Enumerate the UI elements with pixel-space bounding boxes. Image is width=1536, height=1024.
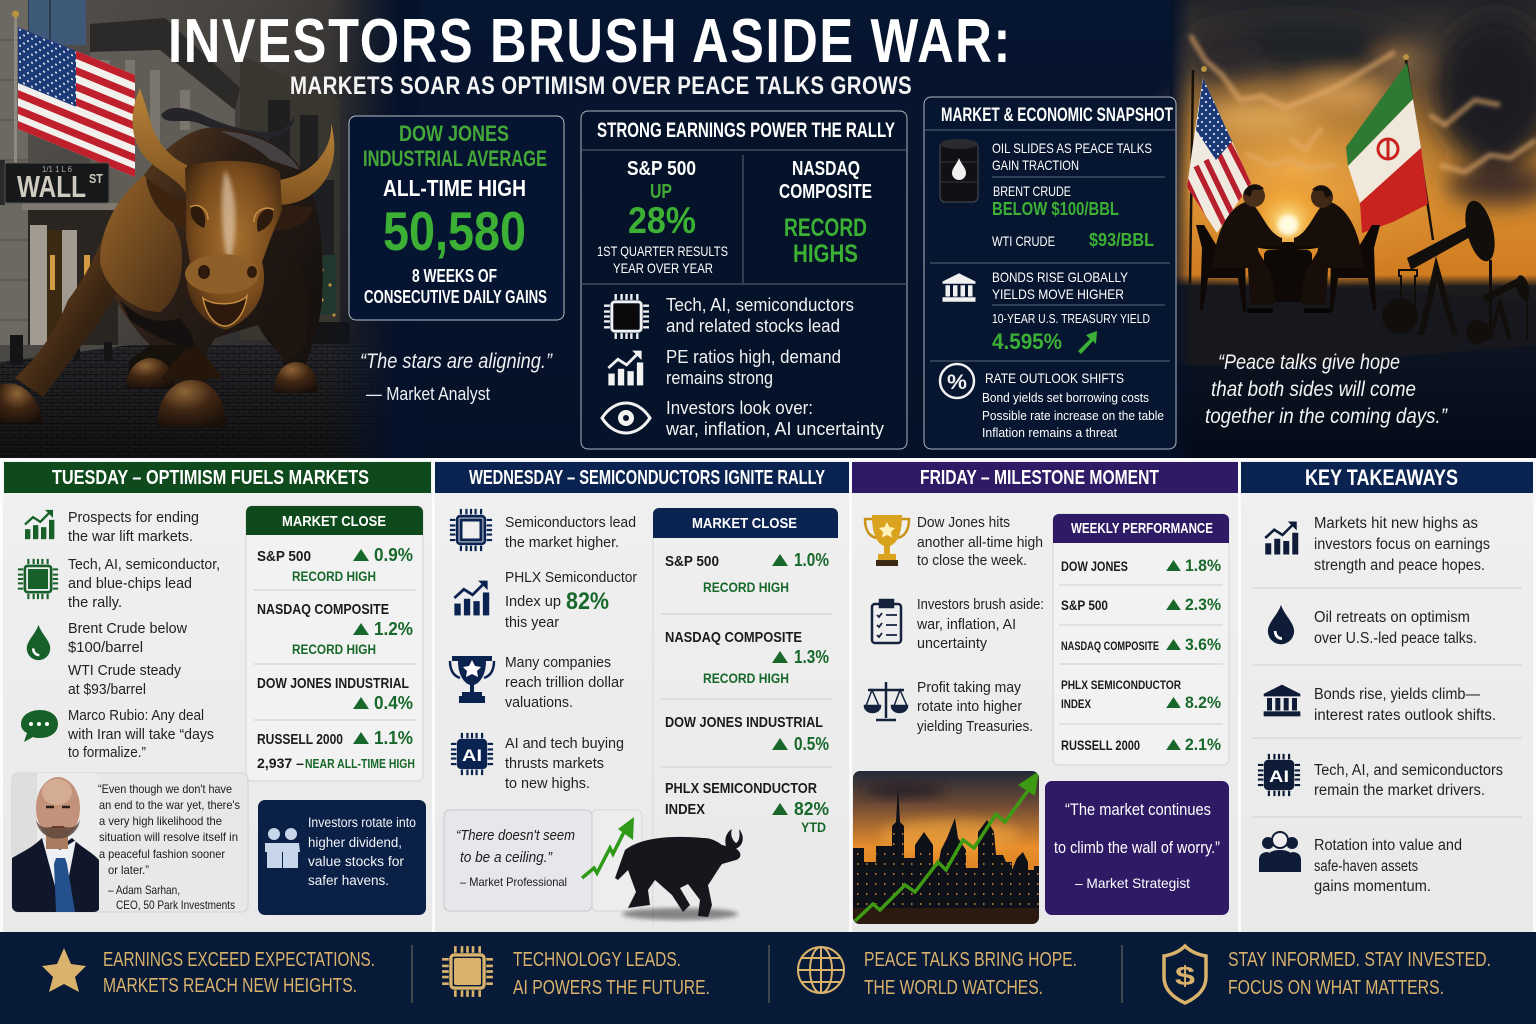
card: ceiling quote: – Market Professional xyxy=(460,875,567,889)
text: brush aside: uncertainty xyxy=(917,636,988,652)
Nasdaq stat: RECORD xyxy=(784,214,867,242)
icon: gold star xyxy=(42,948,86,992)
table: weekly performance: PHLX SEMICONDUCTOR xyxy=(1061,678,1181,692)
text: Dow hits: another all-time high xyxy=(917,535,1043,551)
subtitle: MARKETS SOAR AS OPTIMISM OVER PEACE TALKS GROWS xyxy=(290,72,912,100)
text: takeaway 4: remain the market drivers. xyxy=(1314,782,1485,799)
icon: AI chip xyxy=(1258,754,1300,796)
text: rate outlook: Bond yields set borrowing costs xyxy=(982,391,1149,405)
text: oil: GAIN TRACTION xyxy=(992,157,1079,173)
text: profit taking xyxy=(917,680,1033,735)
image: city skyline with rising arrow xyxy=(853,771,1039,924)
quote: stars aligning xyxy=(360,350,553,404)
text: prospects: the war lift markets. xyxy=(68,528,193,545)
table: market close Tuesday: 0.9% xyxy=(374,545,413,565)
text: oil: BRENT CRUDE xyxy=(993,183,1071,199)
table: market close Tuesday: DOW JONES INDUSTRIAL xyxy=(257,675,409,692)
text: crude: $100/barrel xyxy=(68,639,143,656)
card: rotation xyxy=(258,800,426,915)
quote: peace talks xyxy=(1205,351,1448,428)
card: Adam Sarhan quote: or later.” xyxy=(108,863,149,877)
text: profit taking: Profit taking may xyxy=(917,680,1022,696)
text: PE ratios: remains strong xyxy=(666,368,773,388)
panel: Tuesday xyxy=(3,461,432,932)
table: market close Tuesday: S&P 500 xyxy=(257,548,311,565)
text: profit taking: rotate into higher xyxy=(917,699,1022,715)
card: Adam Sarhan quote: “Even though we don't have xyxy=(98,782,232,796)
text: Rubio xyxy=(67,707,214,761)
text: technology xyxy=(513,949,710,999)
illustration: black bull xyxy=(615,829,743,920)
text: brush aside xyxy=(916,597,1044,652)
table: market close Tuesday: MARKET CLOSE xyxy=(282,513,386,530)
text: prospects xyxy=(68,509,199,545)
icon: green rising arrow xyxy=(582,817,634,878)
text: semiconductors: Semiconductors lead xyxy=(505,514,636,531)
icon: chat bubble xyxy=(21,710,58,742)
title xyxy=(168,7,1012,100)
icon: globe xyxy=(798,947,844,993)
text: rate outlook: Inflation remains a threat xyxy=(982,426,1118,440)
card: Adam Sarhan quote: CEO, 50 Park Investments xyxy=(116,898,235,912)
table: market close Tuesday: NASDAQ COMPOSITE xyxy=(257,601,389,618)
icon: percent xyxy=(940,364,974,398)
text: Dow hits xyxy=(917,515,1043,569)
table: market close Wednesday: PHLX SEMICONDUCTOR xyxy=(665,780,817,797)
icon: clipboard xyxy=(872,600,901,643)
text: semiconductors: the market higher. xyxy=(505,534,619,551)
card: rotation: value stocks for xyxy=(308,854,405,869)
icon: Wall St sign: WALL xyxy=(17,169,86,204)
card: rotation: Investors rotate into xyxy=(308,815,416,830)
image: peace talks at sunset xyxy=(1160,0,1536,458)
icon: AI chip: AI xyxy=(1269,767,1289,786)
table: market close Wednesday: S&P 500 xyxy=(665,553,719,570)
icon: American flag xyxy=(12,10,135,177)
text: PHLX: PHLX Semiconductor xyxy=(505,569,637,586)
text: Dow hits: to close the week. xyxy=(917,553,1027,569)
table: market close Tuesday: RECORD HIGH xyxy=(292,569,376,584)
card: rotation: safer havens. xyxy=(308,873,389,888)
text: oil: WTI CRUDE xyxy=(992,233,1055,249)
heading: Friday xyxy=(852,462,1238,493)
text: investors look over: Investors look over: xyxy=(666,398,813,418)
panel: Dow Jones all-time high xyxy=(349,116,564,320)
table: market close Wednesday: 1.3% xyxy=(794,647,829,667)
table: market close Tuesday: NEAR ALL-TIME HIGH xyxy=(305,757,415,771)
table: market close Wednesday: NASDAQ COMPOSITE xyxy=(665,629,802,646)
text: bonds: YIELDS MOVE HIGHER xyxy=(992,286,1124,302)
icon: rising bars xyxy=(608,351,643,385)
text: takeaway 2: Oil retreats on optimism xyxy=(1314,609,1470,626)
text: technology: TECHNOLOGY LEADS. xyxy=(513,949,681,971)
S&P 500 stat: 28% xyxy=(628,200,696,241)
text: bonds: 4.595% xyxy=(992,329,1062,354)
card: Adam Sarhan quote: a very high likelihood the xyxy=(99,814,222,828)
panel: market and economic snapshot: MARKET & ECONOMIC SNAPSHOT xyxy=(941,105,1173,126)
illustration: negotiators at table xyxy=(1196,184,1380,313)
text: oil: $93/BBL xyxy=(1089,230,1154,250)
icon: chart xyxy=(1265,522,1298,554)
text: AI buying: thrusts markets xyxy=(505,755,604,772)
icon: Iran flag xyxy=(1346,54,1433,240)
table: market close Wednesday: INDEX xyxy=(665,801,705,818)
icon: chip xyxy=(604,294,649,339)
text: earnings: MARKETS REACH NEW HEIGHTS. xyxy=(103,975,357,997)
table: weekly performance: 2.1% xyxy=(1185,735,1221,754)
icon: up arrow xyxy=(1078,331,1097,354)
icon: group of people xyxy=(1259,832,1301,872)
quote: stars aligning: “The stars are aligning.” xyxy=(360,350,553,373)
table: weekly performance xyxy=(1053,514,1229,765)
S&P 500 stat: YEAR OVER YEAR xyxy=(613,260,713,276)
text: profit taking: yielding Treasuries. xyxy=(917,719,1033,735)
text: prospects: Prospects for ending xyxy=(68,509,199,526)
portrait xyxy=(12,773,100,912)
text: takeaway 3: Bonds rise, yields climb— xyxy=(1314,686,1480,703)
text: PHLX: Index up xyxy=(505,593,561,610)
text: AI buying: AI and tech buying xyxy=(505,735,624,752)
table: market close Tuesday: 0.4% xyxy=(374,693,413,713)
text: PE ratios xyxy=(666,347,841,388)
card: Adam Sarhan quote: a peaceful fashion sooner xyxy=(99,847,225,861)
table: market close Wednesday: RECORD HIGH xyxy=(703,580,789,595)
icon: percent: % xyxy=(947,371,967,394)
icon: shield with dollar xyxy=(1164,946,1206,1003)
text: crude: at $93/barrel xyxy=(68,681,146,698)
text: oil xyxy=(992,140,1154,250)
heading: Wednesday: WEDNESDAY – SEMICONDUCTORS IGNITE RALLY xyxy=(469,467,825,489)
text: oil: OIL SLIDES AS PEACE TALKS xyxy=(992,140,1152,156)
S&P 500 stat: 1ST QUARTER RESULTS xyxy=(597,243,728,259)
quote: peace talks: “Peace talks give hope xyxy=(1218,351,1400,374)
text: Rubio: Marco Rubio: Any deal xyxy=(68,707,204,724)
S&P 500 stat xyxy=(597,158,728,276)
title: INVESTORS BRUSH ASIDE WAR: xyxy=(168,7,1012,76)
text: bonds: 10-YEAR U.S. TREASURY YIELD xyxy=(992,311,1150,326)
text: takeaway 1 xyxy=(1314,515,1490,574)
table: market close Tuesday: 2,937 – xyxy=(257,755,304,771)
text: rate outlook xyxy=(982,370,1164,440)
text: crude: WTI Crude steady xyxy=(68,662,181,679)
icon: AI chip xyxy=(451,733,493,775)
table: weekly performance: INDEX xyxy=(1061,697,1091,711)
text: trillion dollar: reach trillion dollar xyxy=(505,674,624,691)
table: market close Wednesday: MARKET CLOSE xyxy=(692,515,797,532)
text: stay informed xyxy=(1228,949,1491,999)
panel: key takeaways xyxy=(1241,461,1533,932)
text: takeaway 3 xyxy=(1314,686,1496,724)
icon: navy chip xyxy=(450,509,492,551)
text: PHLX: this year xyxy=(505,614,559,631)
icon: gold trophy xyxy=(865,515,909,566)
text: oil: BELOW $100/BBL xyxy=(992,199,1119,219)
text: tech lead xyxy=(666,295,854,336)
text: Dow hits: Dow Jones hits xyxy=(917,515,1010,531)
table: market close Wednesday: YTD xyxy=(801,820,826,835)
card: rotation: higher dividend, xyxy=(308,835,402,850)
icon: bank xyxy=(942,273,976,302)
quote: stars aligning: — Market Analyst xyxy=(366,384,490,404)
panel: market and economic snapshot xyxy=(924,97,1176,449)
text: PHLX xyxy=(505,569,637,631)
text: Rubio: with Iran will take “days xyxy=(67,726,214,743)
icon: AI chip: AI xyxy=(462,746,482,765)
table: market close Wednesday: 0.5% xyxy=(794,734,829,754)
text: AI buying: to new highs. xyxy=(505,775,590,792)
icon: green chip xyxy=(18,559,58,599)
text: peace xyxy=(864,949,1077,999)
text: brush aside: Investors brush aside: xyxy=(917,597,1044,613)
table: weekly performance: NASDAQ COMPOSITE xyxy=(1061,639,1159,653)
card: ceiling quote xyxy=(444,810,743,920)
table: market close Tuesday: RUSSELL 2000 xyxy=(257,731,343,748)
card: wall of worry quote xyxy=(1045,781,1229,915)
table: market close Wednesday: 82% xyxy=(794,799,829,819)
icon: star trophy xyxy=(450,656,494,703)
text: investors look over: war, inflation, AI uncertainty xyxy=(665,419,884,439)
icon: shield with dollar: $ xyxy=(1175,961,1195,991)
card: wall of worry quote: “The market continues xyxy=(1065,800,1211,819)
icon: two people xyxy=(265,828,300,868)
text: takeaway 4: Tech, AI, and semiconductors xyxy=(1314,762,1503,779)
text: tech: Tech, AI, semiconductor, xyxy=(68,556,220,573)
heading: Friday: FRIDAY – MILESTONE MOMENT xyxy=(920,467,1159,489)
text: PE ratios: PE ratios high, demand xyxy=(666,347,841,367)
card: wall of worry quote: – Market Strategist xyxy=(1075,875,1190,891)
table: market close Tuesday xyxy=(246,506,423,781)
text: brush aside: war, inflation, AI xyxy=(916,617,1016,633)
text: peace: THE WORLD WATCHES. xyxy=(864,977,1043,999)
text: tech lead: Tech, AI, semiconductors xyxy=(666,295,854,315)
lower section background xyxy=(0,458,1536,932)
text: tech lead: and related stocks lead xyxy=(666,316,840,336)
text: takeaway 1: strength and peace hopes. xyxy=(1314,557,1485,574)
table: weekly performance: S&P 500 xyxy=(1061,598,1108,613)
image: Wall Street bull xyxy=(0,0,420,458)
text: takeaway 4 xyxy=(1314,762,1503,799)
text: investors look over xyxy=(665,398,884,439)
panel: Dow Jones all-time high: CONSECUTIVE DAILY GAINS xyxy=(364,287,547,307)
card: wall of worry quote: to climb the wall of worry.” xyxy=(1054,838,1220,857)
table: market close Tuesday: 1.2% xyxy=(374,619,413,639)
text: trillion dollar xyxy=(505,654,624,711)
Nasdaq stat: COMPOSITE xyxy=(779,181,872,203)
icon: gold chip xyxy=(442,946,493,997)
footer banner xyxy=(0,932,1536,1024)
icon: scales xyxy=(865,682,907,720)
icon: bank xyxy=(1264,685,1300,716)
Nasdaq stat: NASDAQ xyxy=(792,158,860,180)
table: weekly performance: 1.8% xyxy=(1185,556,1221,575)
panel: strong earnings: STRONG EARNINGS POWER THE RALLY xyxy=(597,119,895,142)
panel: Dow Jones all-time high: INDUSTRIAL AVERAGE xyxy=(363,146,547,171)
S&P 500 stat: S&P 500 xyxy=(627,158,696,180)
icon: oil barrel xyxy=(940,139,978,202)
Nasdaq stat xyxy=(779,158,872,268)
panel: Dow Jones all-time high: 8 WEEKS OF xyxy=(412,266,497,286)
text: Rubio: to formalize.” xyxy=(68,744,146,761)
text: technology: AI POWERS THE FUTURE. xyxy=(513,977,710,999)
text: semiconductors xyxy=(505,514,636,551)
table: market close Wednesday: RECORD HIGH xyxy=(703,671,789,686)
text: tech: and blue-chips lead xyxy=(68,575,192,592)
card: Adam Sarhan quote: situation will resolve itself in xyxy=(99,830,238,844)
text: rate outlook: RATE OUTLOOK SHIFTS xyxy=(985,370,1124,386)
card: ceiling quote: “There doesn't seem xyxy=(456,828,575,844)
text: takeaway 1: Markets hit new highs as xyxy=(1314,515,1478,532)
text: takeaway 5: safe-haven assets xyxy=(1314,858,1418,875)
text: crude: Brent Crude below xyxy=(68,620,187,637)
card: Adam Sarhan quote: – Adam Sarhan, xyxy=(108,883,180,897)
S&P 500 stat: UP xyxy=(650,181,672,203)
Nasdaq stat: HIGHS xyxy=(793,240,858,268)
heading: Tuesday: TUESDAY – OPTIMISM FUELS MARKETS xyxy=(52,467,369,489)
text: PHLX: 82% xyxy=(566,588,609,615)
icon: eye xyxy=(602,403,650,433)
panel: Friday xyxy=(852,461,1238,932)
text: rate outlook: Possible rate increase on the table xyxy=(982,409,1164,423)
icon: US flag, right xyxy=(1187,66,1251,284)
text: crude xyxy=(68,620,187,698)
table: weekly performance: DOW JONES xyxy=(1061,559,1128,574)
icon: green drop xyxy=(27,625,50,660)
text: takeaway 5: gains momentum. xyxy=(1314,878,1431,895)
text: earnings xyxy=(103,949,375,997)
text: takeaway 5: Rotation into value and xyxy=(1314,837,1462,854)
table: market close Tuesday: 1.1% xyxy=(374,728,413,748)
table: weekly performance: RUSSELL 2000 xyxy=(1061,738,1140,753)
illustration: bronze bull xyxy=(0,88,334,427)
table: market close Wednesday: 1.0% xyxy=(794,550,829,570)
text: takeaway 3: interest rates outlook shifts. xyxy=(1314,707,1496,724)
icon: navy chart xyxy=(454,581,489,615)
table: market close Tuesday: RECORD HIGH xyxy=(292,642,376,657)
text: trillion dollar: valuations. xyxy=(505,694,573,711)
table: weekly performance: 3.6% xyxy=(1185,635,1221,654)
quote: peace talks: together in the coming days.” xyxy=(1205,405,1448,428)
icon: oil drop xyxy=(1268,605,1294,644)
table: weekly performance: 2.3% xyxy=(1185,595,1221,614)
text: takeaway 5 xyxy=(1314,837,1462,895)
text: peace: PEACE TALKS BRING HOPE. xyxy=(864,949,1077,971)
panel: Dow Jones all-time high: ALL-TIME HIGH xyxy=(383,175,526,201)
card: Adam Sarhan quote xyxy=(12,773,248,912)
panel: Wednesday xyxy=(0,461,1536,1024)
big number: 50,580 xyxy=(383,200,526,262)
icon: Wall St sign: ST xyxy=(89,171,103,186)
heading: key takeaways xyxy=(1241,462,1533,493)
text: tech: the rally. xyxy=(68,594,122,611)
text: earnings: EARNINGS EXCEED EXPECTATIONS. xyxy=(103,949,375,971)
text: tech xyxy=(68,556,220,611)
panel: Dow Jones all-time high: DOW JONES xyxy=(399,121,509,146)
text: trillion dollar: Many companies xyxy=(505,654,611,671)
heading: key takeaways: KEY TAKEAWAYS xyxy=(1305,465,1458,490)
table: weekly performance: WEEKLY PERFORMANCE xyxy=(1071,521,1213,537)
card: ceiling quote: to be a ceiling.” xyxy=(460,850,553,866)
text: takeaway 2: over U.S.-led peace talks. xyxy=(1314,630,1477,647)
text: bonds: BONDS RISE GLOBALLY xyxy=(992,269,1129,285)
text: takeaway 1: investors focus on earnings xyxy=(1314,536,1490,553)
text: bonds xyxy=(992,269,1150,354)
card: Adam Sarhan quote: an end to the war yet, there's xyxy=(99,798,240,812)
text: AI buying xyxy=(505,735,624,792)
heading: Wednesday xyxy=(435,462,849,493)
table: market close Wednesday: DOW JONES INDUSTRIAL xyxy=(665,714,823,731)
table: market close Wednesday xyxy=(653,508,838,925)
illustration: oil pumps xyxy=(1382,198,1532,344)
table: weekly performance: 8.2% xyxy=(1185,693,1221,712)
text: stay informed: FOCUS ON WHAT MATTERS. xyxy=(1228,977,1444,999)
quote: peace talks: that both sides will come xyxy=(1211,378,1416,401)
icon: green chart xyxy=(25,510,54,539)
heading: Tuesday xyxy=(4,462,431,493)
icon: Wall St sign: 1/1 1 L 6 xyxy=(42,165,73,174)
text: takeaway 2 xyxy=(1314,609,1477,647)
icon: Wall St sign xyxy=(0,160,109,205)
panel: strong earnings xyxy=(581,111,907,449)
